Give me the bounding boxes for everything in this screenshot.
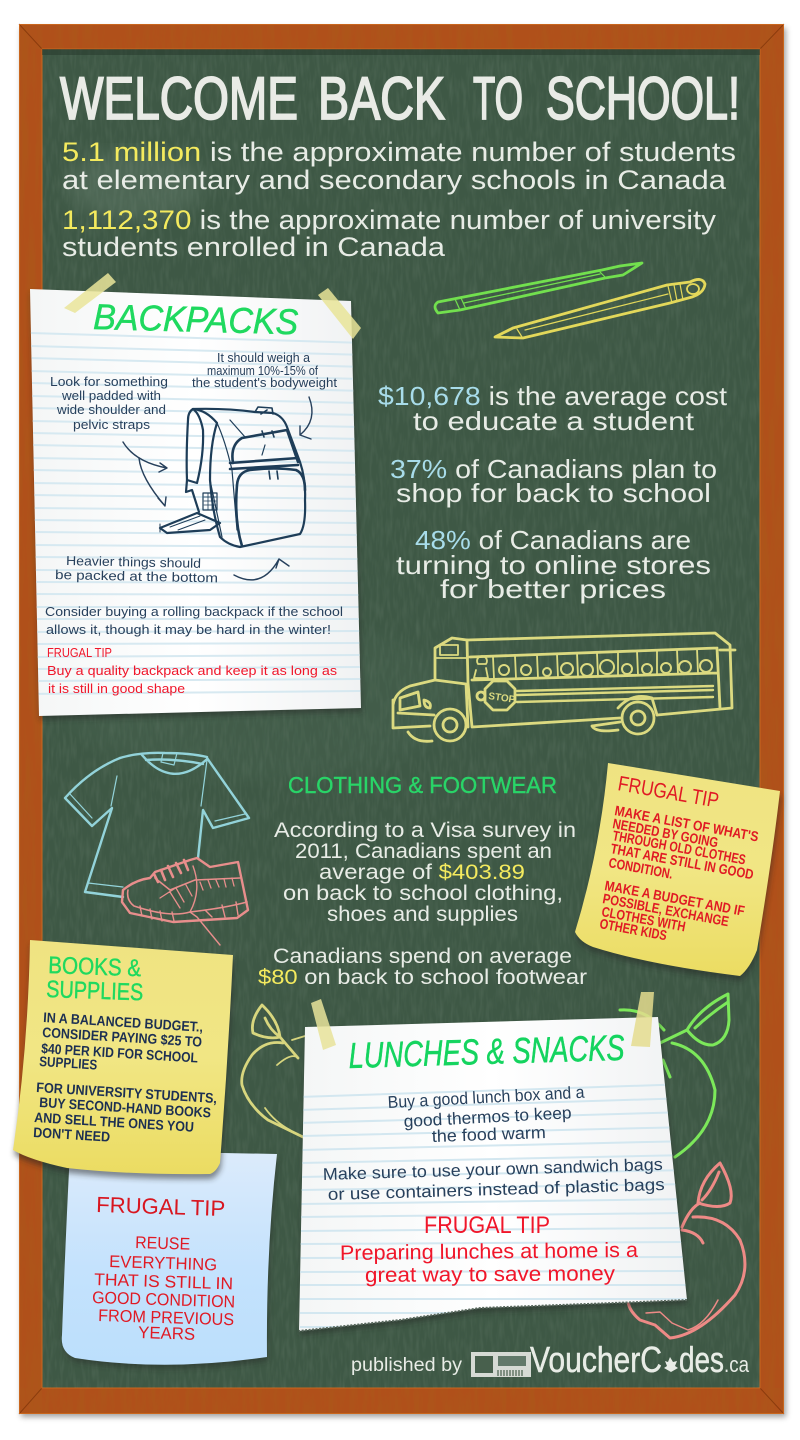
- tip text: list: NEEDED BY GOING: [611, 815, 720, 850]
- arrow: bottom: [234, 559, 289, 580]
- tape: backpacks left: [64, 273, 116, 313]
- clothing and footwear: 2011, Canadians spent an: [295, 840, 552, 863]
- frugal tip: backpacks: FRUGAL TIP: [47, 645, 112, 660]
- title: WELCOME: [60, 65, 298, 132]
- intro statistics: at elementary and secondary schools in Canada: [62, 165, 727, 195]
- tip text: reuse: EVERYTHING: [109, 1252, 217, 1274]
- text: university students: DON'T NEED: [33, 1124, 111, 1145]
- icon: pink apple: [628, 1163, 745, 1338]
- text: university students: FOR UNIVERSITY STUDENTS,: [36, 1079, 217, 1106]
- icon: sneaker: [122, 858, 248, 945]
- heading: lunches and snacks: LUNCHES & SNACKS: [348, 1027, 625, 1076]
- tip text: reuse: THAT IS STILL IN: [94, 1270, 233, 1293]
- publisher logo: .ca: [724, 1352, 750, 1377]
- icon: t-shirt: [65, 753, 249, 897]
- frugal tip: lunches: great way to save money: [365, 1262, 616, 1287]
- callout: bottom weight: [55, 553, 218, 585]
- publisher logo: [351, 1339, 750, 1380]
- clothing and footwear: $80 on back to school footwear: [258, 966, 587, 989]
- frugal tip: backpacks: it is still in good shape: [48, 681, 185, 696]
- callout: padding: pelvic straps: [73, 417, 151, 432]
- tip text: budget: MAKE A BUDGET AND IF: [603, 877, 746, 919]
- arrow: padding upper: [123, 442, 167, 472]
- tape: backpacks right: [318, 288, 361, 339]
- icon: backpack: [160, 407, 305, 547]
- text: university students: BUY SECOND-HAND BOOKS: [39, 1094, 211, 1120]
- text: lunch box: the food warm: [431, 1123, 546, 1146]
- publisher logo: published by: [351, 1355, 463, 1376]
- heading: books and supplies: [46, 952, 144, 1006]
- intro statistics: 1,112,370 is the approximate number of university: [62, 205, 717, 235]
- right column statistics: 48% of Canadians are: [415, 525, 691, 555]
- icon: pencils: [435, 263, 705, 338]
- tip text: reuse: YEARS: [138, 1323, 195, 1344]
- callout: padding: well padded with: [61, 388, 161, 403]
- text: lunch box: [387, 1083, 585, 1146]
- callout: weight: [192, 350, 337, 390]
- clothing and footwear: [258, 772, 587, 989]
- arrow: padding lower: [139, 458, 166, 506]
- callout: padding: Look for something: [50, 374, 168, 389]
- panel: frugal tip sticky right: [575, 763, 781, 981]
- intro statistics: [62, 137, 736, 262]
- tip text: budget: CLOTHES WITH: [600, 903, 687, 934]
- tip text: reuse: FROM PREVIOUS: [98, 1306, 234, 1329]
- panel: frugal tip blue note: [62, 1150, 278, 1369]
- text: balanced budget: [39, 1009, 203, 1073]
- text: sandwich bags: or use containers instead of plastic bags: [328, 1175, 665, 1204]
- callout: bottom weight: be packed at the bottom: [55, 567, 218, 585]
- title: BACK: [318, 65, 445, 132]
- tip text: list: THROUGH OLD CLOTHES: [611, 827, 747, 868]
- tip text: reuse: GOOD CONDITION: [92, 1288, 235, 1311]
- callout: padding: [50, 374, 168, 432]
- heading: books and supplies: BOOKS &: [48, 952, 142, 982]
- text: lunch box: Buy a good lunch box and a: [387, 1083, 585, 1112]
- frugal tip: backpacks: Buy a quality backpack and keep it as long as: [47, 663, 338, 678]
- text: university students: AND SELL THE ONES YOU: [34, 1109, 194, 1135]
- tip text: list: MAKE A LIST OF WHAT'S: [613, 802, 760, 845]
- text: rolling backpack: Consider buying a rolling backpack if the school: [45, 604, 343, 619]
- frugal tip: backpacks: [47, 645, 338, 696]
- tip text: budget: OTHER KIDS: [598, 915, 668, 943]
- clothing and footwear: average of $403.89: [319, 861, 525, 884]
- callout: bottom weight: Heavier things should: [66, 553, 201, 571]
- text: balanced budget: CONSIDER PAYING $25 TO: [42, 1024, 203, 1050]
- icon: maple leaf: [664, 1357, 678, 1372]
- tip text: list: [607, 802, 760, 882]
- tip text: list: THAT ARE STILL IN GOOD: [609, 840, 755, 882]
- heading: backpacks: BACKPACKS: [93, 296, 299, 342]
- title: [60, 65, 740, 132]
- icon: yellow apple: [242, 1005, 305, 1137]
- text: balanced budget: $40 PER KID FOR SCHOOL: [41, 1040, 199, 1066]
- clothing and footwear: shoes and supplies: [327, 903, 518, 926]
- panel: lunches and snacks note: [299, 1017, 690, 1335]
- frugal tip: lunches: FRUGAL TIP: [424, 1212, 550, 1239]
- icon: school bus: STOP: [488, 691, 516, 706]
- title: TO: [473, 65, 523, 132]
- heading: books and supplies: SUPPLIES: [46, 976, 144, 1006]
- text: rolling backpack: allows it, though it may be hard in the winter!: [46, 622, 331, 637]
- heading: frugal tip: FRUGAL TIP: [616, 772, 721, 813]
- tip text: budget: [598, 877, 746, 943]
- panel: backpacks note: [30, 289, 365, 720]
- text: university students: [33, 1079, 217, 1145]
- icon: school bus: [393, 633, 735, 741]
- clothing and footwear: Canadians spend on average: [273, 945, 572, 968]
- text: lunch box: good thermos to keep: [403, 1103, 572, 1131]
- right column statistics: shop for back to school: [396, 478, 711, 508]
- intro statistics: students enrolled in Canada: [62, 232, 446, 262]
- right column statistics: to educate a student: [413, 406, 695, 436]
- clothing and footwear: on back to school clothing,: [283, 882, 563, 905]
- right column statistics: for better prices: [440, 574, 666, 604]
- intro statistics: 5.1 million is the approximate number of students: [62, 137, 736, 167]
- text: balanced budget: SUPPLIES: [39, 1053, 98, 1073]
- publisher logo: VoucherC: [530, 1339, 662, 1380]
- text: rolling backpack: [45, 604, 343, 637]
- tape: lunches left: [311, 999, 336, 1050]
- right column statistics: $10,678 is the average cost: [378, 381, 728, 411]
- text: balanced budget: IN A BALANCED BUDGET.,: [43, 1009, 203, 1035]
- clothing and footwear: CLOTHING & FOOTWEAR: [288, 772, 557, 798]
- tape: lunches right: [631, 992, 654, 1047]
- callout: weight: the student's bodyweight: [192, 375, 337, 390]
- callout: weight: maximum 10%-15% of: [207, 363, 318, 378]
- icon: green apple: [620, 994, 729, 1157]
- callout: weight: It should weigh a: [217, 350, 311, 365]
- clothing and footwear: According to a Visa survey in: [274, 819, 576, 842]
- panel: books and supplies sticky: [13, 940, 234, 1179]
- tip text: budget: POSSIBLE, EXCHANGE: [601, 890, 730, 929]
- arrow: weight: [300, 397, 312, 439]
- right column statistics: [378, 381, 728, 604]
- tip text: list: CONDITION.: [607, 854, 674, 882]
- tip text: reuse: REUSE: [135, 1233, 190, 1254]
- icon: coupon barcode: [471, 1352, 531, 1377]
- frugal tip: lunches: [340, 1212, 638, 1287]
- right column statistics: turning to online stores: [396, 550, 711, 580]
- text: sandwich bags: Make sure to use your own sandwich bags: [323, 1155, 663, 1184]
- callout: padding: wide shoulder and: [56, 402, 166, 417]
- frugal tip: lunches: Preparing lunches at home is a: [340, 1239, 638, 1265]
- right column statistics: 37% of Canadians plan to: [390, 454, 717, 484]
- heading: frugal tip: FRUGAL TIP: [96, 1192, 226, 1221]
- tip text: reuse: [92, 1233, 235, 1344]
- text: sandwich bags: [323, 1155, 665, 1204]
- publisher logo: des: [679, 1339, 724, 1380]
